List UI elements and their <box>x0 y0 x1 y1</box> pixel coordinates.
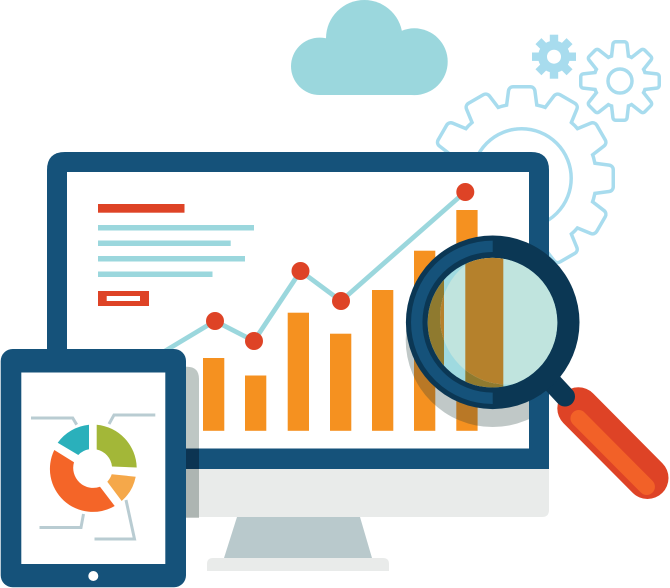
bar chart <box>203 210 478 431</box>
monitor frame <box>47 152 549 469</box>
tablet shadow <box>186 367 199 518</box>
magnifier shadow <box>406 330 529 427</box>
icon: medium outline gear <box>584 44 656 118</box>
text block on screen <box>98 204 254 306</box>
icon: large outline gear <box>435 92 608 265</box>
magnifier handle <box>578 408 648 487</box>
tablet home button <box>88 571 98 581</box>
cloud <box>291 0 448 95</box>
line chart <box>165 183 474 351</box>
magnifier ring <box>406 235 580 409</box>
icon: small solid gear <box>532 35 576 79</box>
monitor screen <box>67 172 529 448</box>
tablet <box>1 349 186 587</box>
magnifier lens <box>428 258 558 388</box>
monitor stand <box>207 517 389 571</box>
donut leader lines <box>31 415 155 539</box>
monitor chin <box>47 465 549 517</box>
magnifier neck <box>545 375 565 396</box>
donut chart <box>50 425 137 512</box>
